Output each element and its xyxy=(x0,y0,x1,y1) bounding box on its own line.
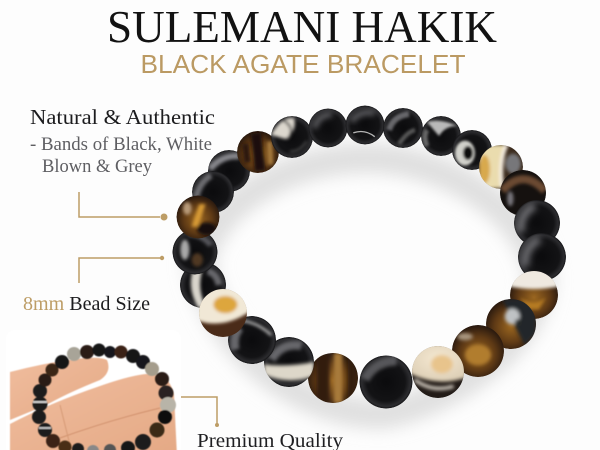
bead 9 eye xyxy=(452,130,492,170)
bead 22 cream amber xyxy=(199,289,247,337)
bead 15 eye brown xyxy=(486,299,536,349)
bead 11 xyxy=(500,170,546,216)
bead 13 xyxy=(518,233,566,281)
feature text: natural and authentic: Natural & Authentic xyxy=(30,105,215,129)
feature text: natural and authentic: Blown & Grey xyxy=(42,157,153,177)
connector: premium quality xyxy=(181,397,219,427)
bead 10 banded cream xyxy=(479,145,523,189)
bead 21 black xyxy=(228,316,276,364)
bracelet shadow xyxy=(200,158,540,414)
feature text: bead size: 8mm Bead Size xyxy=(23,294,150,315)
bead 17 cream xyxy=(412,346,464,398)
bead 8 xyxy=(421,116,461,156)
bead 12 xyxy=(514,200,560,246)
bead 4 swirl xyxy=(271,116,313,158)
bead 19 tiger xyxy=(308,353,358,403)
feature text: natural and authentic: - Bands of Black, White xyxy=(30,135,212,155)
bead 7 xyxy=(383,108,423,148)
bead 6 xyxy=(346,106,384,144)
bead 24 black-silver xyxy=(172,230,218,274)
bead 3 brown xyxy=(237,131,279,173)
bead 23 swirl xyxy=(180,262,226,308)
subtitle: BLACK AGATE BRACELET xyxy=(140,49,466,79)
photo card xyxy=(10,342,178,450)
hand photo xyxy=(10,358,177,450)
feature text: natural and authentic xyxy=(30,105,215,177)
bead 1 xyxy=(208,150,250,192)
bead 25 amber brown xyxy=(176,196,220,238)
bead 14 white top amber xyxy=(510,269,558,319)
bracelet xyxy=(172,106,566,408)
bead 20 white band xyxy=(264,337,314,387)
title: SULEMANI HAKIK xyxy=(107,1,497,52)
connector: natural and authentic xyxy=(79,192,168,220)
bead 5 xyxy=(308,108,348,148)
mini bracelet xyxy=(32,344,176,450)
bead 16 amber xyxy=(452,325,504,377)
connector: bead size xyxy=(79,256,164,283)
bead 2 xyxy=(192,171,234,213)
bead 18 black xyxy=(360,356,412,408)
